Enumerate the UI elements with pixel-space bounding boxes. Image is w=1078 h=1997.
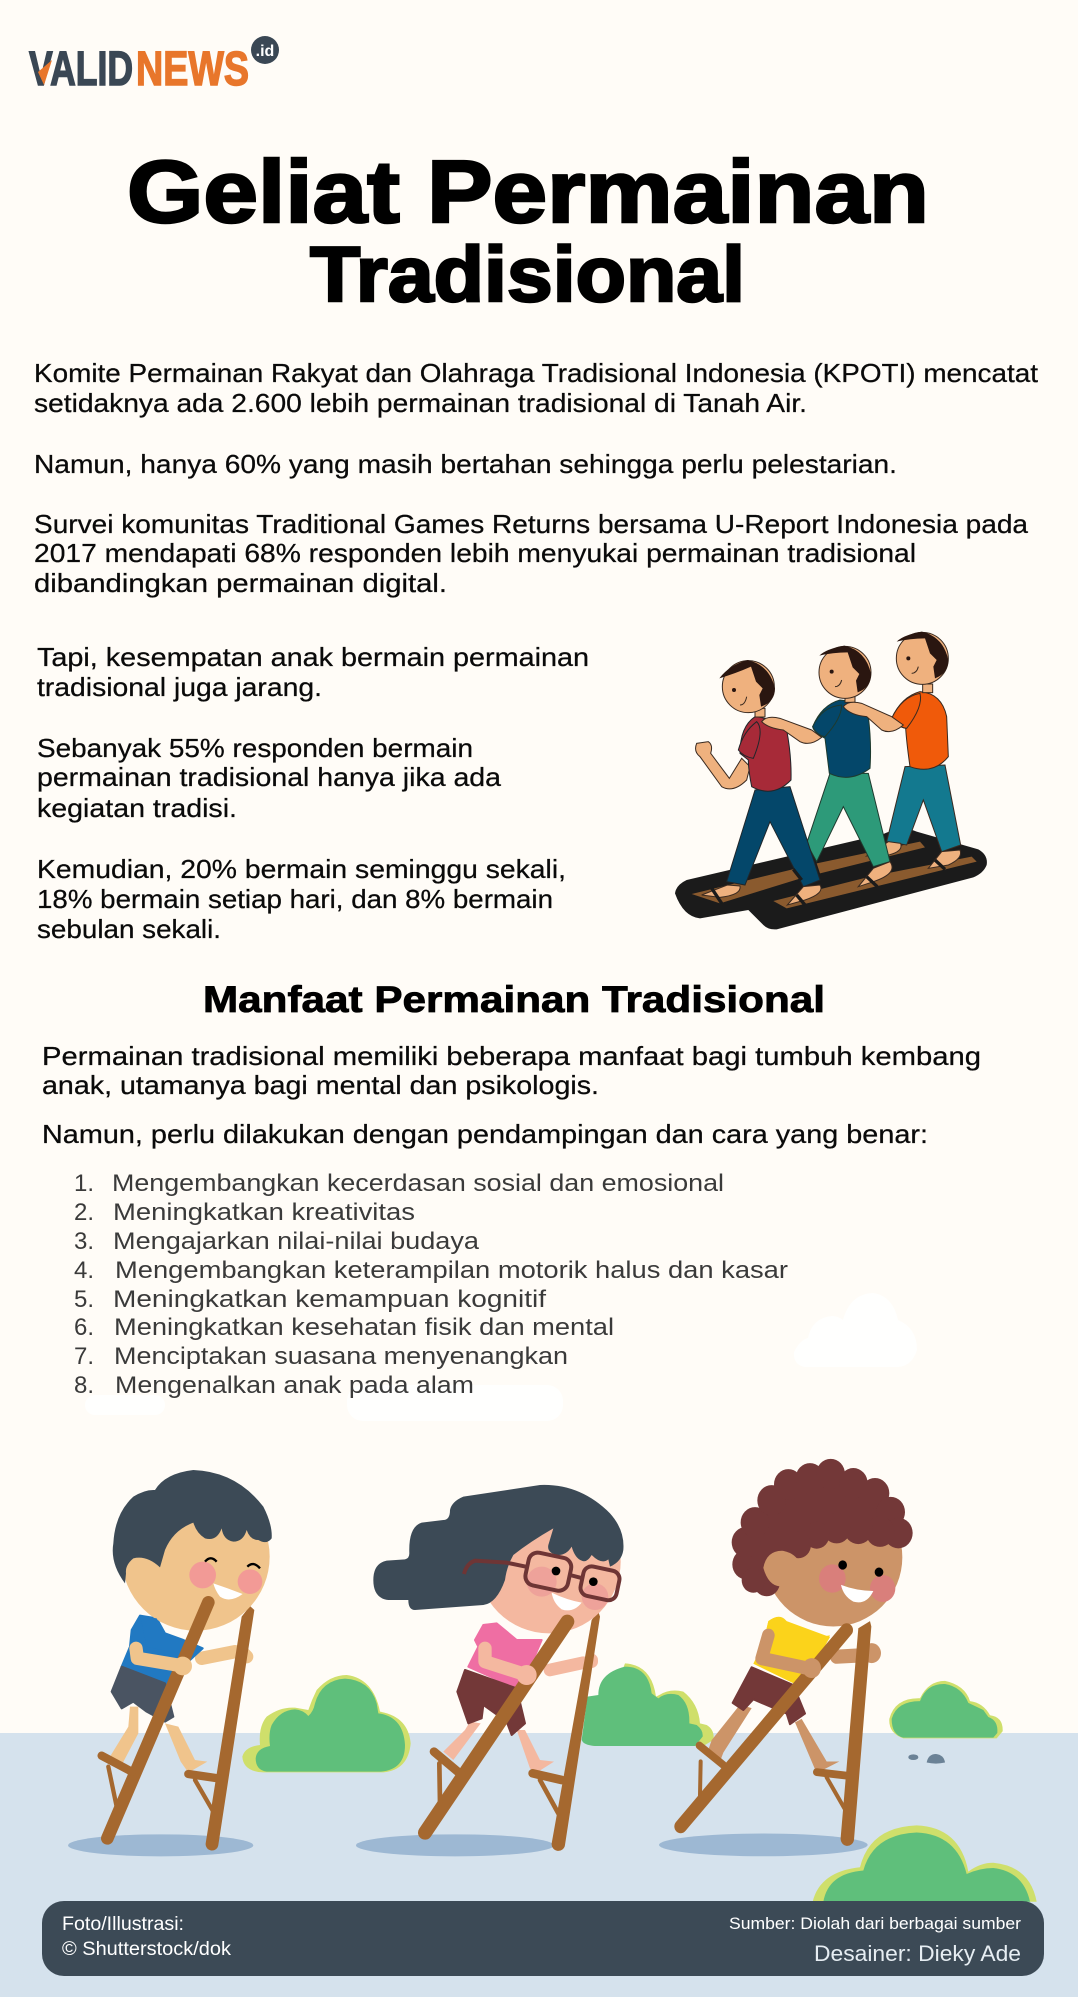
- photo credit: © Shutterstock/dok: [62, 1939, 232, 1960]
- survey text: 18% bermain setiap hari, dan 8% bermain: [37, 884, 553, 914]
- survey text: sebulan sekali.: [37, 914, 221, 944]
- title: Geliat Permainan: [127, 142, 929, 241]
- intro text: Komite Permainan Rakyat dan Olahraga Tradisional Indonesia (KPOTI) mencatat: [34, 358, 1039, 388]
- survey text: Kemudian, 20% bermain seminggu sekali,: [37, 854, 566, 884]
- benefits intro: [42, 1041, 981, 1149]
- designer credit: Desainer: Dieky Ade: [814, 1941, 1021, 1966]
- title: [127, 142, 929, 318]
- benefits list: 4.: [74, 1257, 94, 1284]
- bush 4: [813, 1825, 1037, 1902]
- benefits list: Mengenalkan anak pada alam: [115, 1372, 474, 1399]
- benefits list: Menciptakan suasana menyenangkan: [114, 1343, 568, 1370]
- benefits list: Meningkatkan kemampuan kognitif: [113, 1286, 546, 1313]
- benefits list: 5.: [74, 1286, 94, 1313]
- survey text: [37, 642, 589, 944]
- ground: [0, 1733, 1078, 1997]
- survey text: Sebanyak 55% responden bermain: [37, 733, 473, 763]
- illustration: three children walking on bakiak: [675, 632, 987, 929]
- bush 2: [582, 1663, 714, 1746]
- survey text: tradisional juga jarang.: [37, 672, 322, 702]
- benefits list: [74, 1170, 788, 1399]
- bush 1: [242, 1675, 411, 1772]
- title: Tradisional: [310, 230, 745, 318]
- benefits list: Meningkatkan kreativitas: [113, 1199, 415, 1226]
- benefits list: Meningkatkan kesehatan fisik dan mental: [114, 1314, 614, 1341]
- intro text: Namun, hanya 60% yang masih bertahan sehingga perlu pelestarian.: [34, 449, 897, 479]
- kid 2: girl with glasses on stilts: [356, 1485, 623, 1856]
- arms on shoulders: [762, 702, 903, 743]
- benefits list: Mengembangkan keterampilan motorik halus dan kasar: [115, 1257, 788, 1284]
- walker: front, red shirt: [696, 660, 821, 905]
- intro text: setidaknya ada 2.600 lebih permainan tradisional di Tanah Air.: [34, 388, 807, 418]
- intro text: dibandingkan permainan digital.: [34, 568, 447, 598]
- benefits intro: Namun, perlu dilakukan dengan pendampingan dan cara yang benar:: [42, 1119, 928, 1149]
- source credit: Sumber: Diolah dari berbagai sumber: [729, 1914, 1021, 1933]
- intro text: Survei komunitas Traditional Games Returns bersama U-Report Indonesia pada: [34, 509, 1029, 539]
- survey text: Tapi, kesempatan anak bermain permainan: [37, 642, 589, 672]
- logo: VALID: [29, 43, 133, 96]
- benefits list: 3.: [74, 1228, 94, 1255]
- logo: [29, 36, 279, 96]
- logo: .id: [256, 43, 274, 60]
- kid 3: curly-haired child with yellow shirt on stilts: [659, 1459, 913, 1856]
- benefits list: 6.: [74, 1314, 94, 1341]
- survey text: permainan tradisional hanya jika ada: [37, 762, 502, 792]
- bakiak board: [675, 829, 987, 929]
- benefits list: 7.: [74, 1343, 94, 1370]
- benefits list: 8.: [74, 1372, 94, 1399]
- logo: NEWS: [136, 43, 249, 96]
- intro text: [34, 358, 1039, 598]
- kid 1: boy with blue shirt on stilts: [68, 1470, 272, 1856]
- survey text: kegiatan tradisi.: [37, 793, 237, 823]
- benefits intro: Permainan tradisional memiliki beberapa manfaat bagi tumbuh kembang: [42, 1041, 981, 1071]
- benefits list: Mengajarkan nilai-nilai budaya: [113, 1228, 480, 1255]
- benefits list: 2.: [74, 1199, 94, 1226]
- white clouds: [85, 1293, 917, 1421]
- footer bar: [42, 1901, 1044, 1976]
- walker: middle, navy shirt: [807, 646, 892, 887]
- walker: back, orange shirt: [867, 632, 961, 868]
- photo credit: Foto/Illustrasi:: [62, 1914, 184, 1935]
- bush 3 and stones: [889, 1681, 1003, 1764]
- benefits list: 1.: [74, 1170, 94, 1197]
- intro text: 2017 mendapati 68% responden lebih menyukai permainan tradisional: [34, 538, 916, 568]
- section heading: Manfaat Permainan Tradisional: [203, 979, 825, 1020]
- photo credit: [62, 1914, 232, 1960]
- benefits list: Mengembangkan kecerdasan sosial dan emosional: [112, 1170, 724, 1197]
- benefits intro: anak, utamanya bagi mental dan psikologis.: [42, 1070, 599, 1100]
